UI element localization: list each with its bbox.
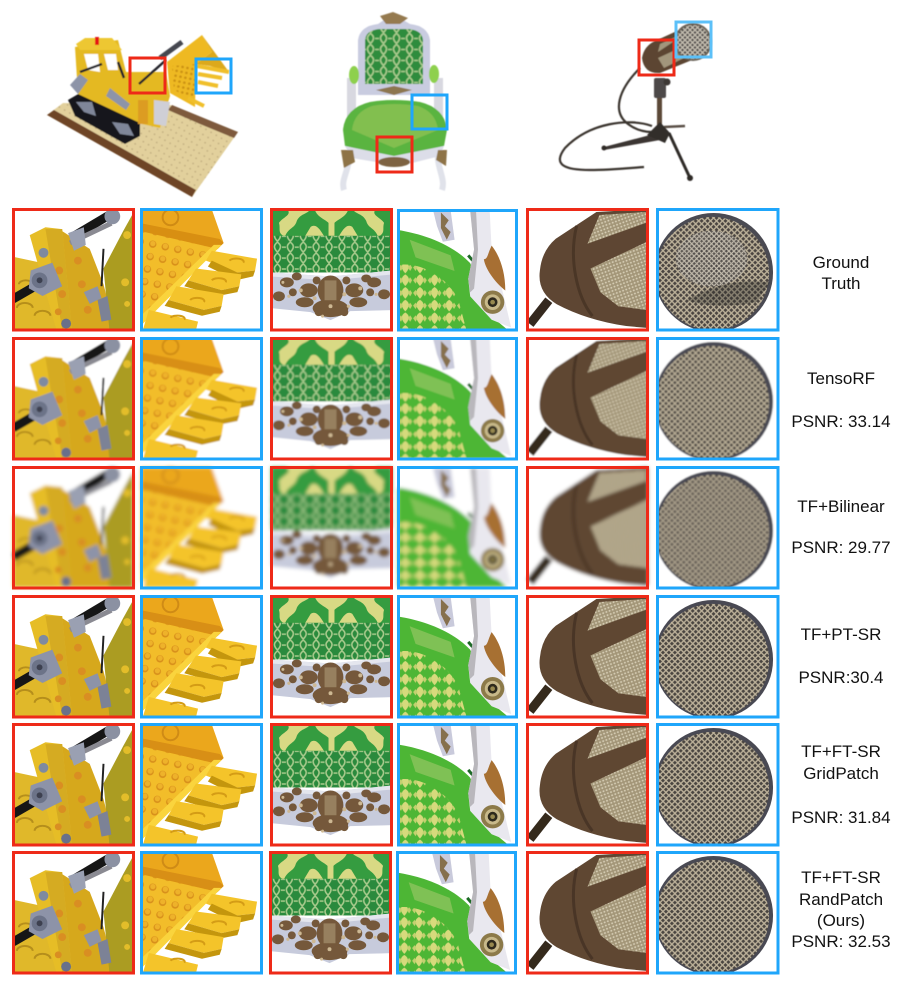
crop: chair red [271, 724, 392, 845]
scene thumbnail: bulldozer [47, 35, 238, 197]
label: TF+Bilinear: TF+Bilinear [797, 497, 885, 516]
crop: mic red [527, 209, 648, 330]
label: Ground Truth: Truth [821, 274, 861, 293]
crop: mic blue [654, 852, 778, 975]
crop: mic blue [654, 209, 778, 332]
zoom box blue [412, 95, 447, 129]
crop: chair red [271, 338, 392, 459]
label: TF+FT-SR GridPatch: TF+FT-SR [801, 742, 881, 761]
label: TF+FT-SR GridPatch: PSNR: 31.84 [791, 808, 891, 827]
row: TensoRF [13, 338, 891, 461]
label: TensoRF: PSNR: 33.14 [791, 412, 891, 431]
crop: lego red [13, 724, 133, 844]
crop: lego blue [141, 468, 261, 588]
crop: chair blue [398, 339, 517, 458]
crop frames [14, 852, 778, 973]
crop: mic blue [654, 724, 778, 847]
scene thumbnail: chair [341, 12, 447, 190]
zoom box red [130, 58, 165, 93]
row: TF+FT-SR GridPatch [13, 724, 891, 847]
crop: chair red [271, 596, 392, 717]
crop: mic blue [654, 596, 778, 719]
crop: lego red [13, 467, 133, 588]
crop: mic red [527, 596, 648, 717]
zoom box blue [196, 59, 231, 93]
crop: lego blue [141, 338, 261, 458]
scene thumbnail: microphone [560, 22, 712, 181]
crop: lego blue [141, 852, 261, 972]
crop: lego red [13, 338, 133, 458]
crop: chair blue [398, 597, 517, 716]
crop: chair red [271, 467, 392, 588]
label: TF+PT-SR: PSNR:30.4 [798, 668, 884, 687]
row: TF+Bilinear [13, 467, 891, 590]
label: TF+FT-SR RandPatch (Ours): RandPatch [799, 890, 883, 909]
label: TF+Bilinear: PSNR: 29.77 [791, 538, 891, 557]
crop: lego blue [141, 596, 261, 716]
label: TF+PT-SR: TF+PT-SR [801, 625, 881, 644]
zoom box blue [676, 22, 711, 57]
crop: chair blue [397, 853, 516, 972]
crop: chair blue [398, 725, 517, 844]
crop: chair red [271, 209, 392, 330]
crop: lego red [13, 596, 133, 716]
label: TF+FT-SR RandPatch (Ours): PSNR: 32.53 [791, 932, 891, 951]
crop frames [14, 724, 778, 845]
crop frames [14, 596, 778, 717]
crop: chair red [270, 852, 391, 973]
zoom box red [639, 40, 674, 75]
crop: lego red [13, 209, 134, 330]
crop: lego blue [141, 724, 261, 844]
crop: mic red [527, 852, 648, 973]
row: TF+PT-SR [13, 596, 884, 719]
row: Ground Truth [13, 209, 869, 332]
label: TF+FT-SR GridPatch: GridPatch [803, 764, 879, 783]
crop frames [14, 468, 778, 588]
crop: mic red [527, 467, 648, 588]
crop: lego red [13, 852, 133, 972]
crop frames [14, 338, 778, 459]
crop: chair blue [398, 210, 517, 330]
zoom box red [377, 137, 412, 172]
crop: mic red [527, 338, 648, 459]
crop: lego blue [141, 210, 262, 330]
crop: mic red [527, 724, 648, 845]
crop: mic blue [654, 467, 778, 590]
label: TensoRF: TensoRF [807, 369, 875, 388]
label: TF+FT-SR RandPatch (Ours): TF+FT-SR [801, 868, 881, 887]
label: Ground Truth: Ground [813, 253, 869, 272]
row: TF+FT-SR RandPatch (Ours) [13, 852, 891, 975]
crop: chair blue [398, 468, 517, 587]
label: TF+FT-SR RandPatch (Ours): (Ours) [817, 911, 865, 930]
crop: mic blue [654, 338, 778, 461]
